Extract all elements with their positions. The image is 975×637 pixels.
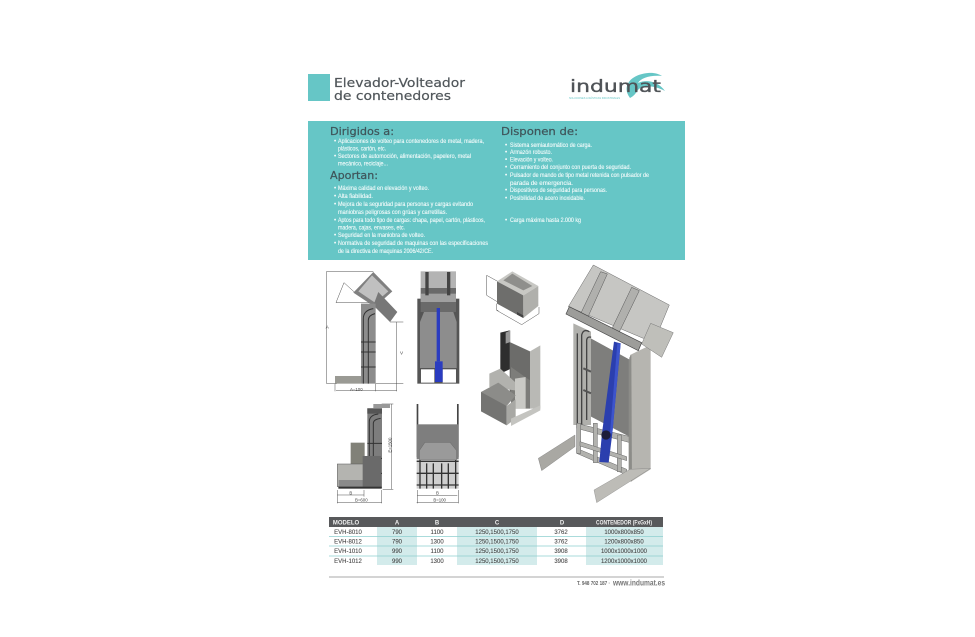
list: Aportan: Seguridad en la maniobra de volteo. — [338, 232, 425, 239]
list: Disponen de: Dispositivos de seguridad para personas. — [510, 187, 607, 194]
list: Aportan: • — [334, 185, 336, 192]
title square — [308, 74, 330, 101]
list: Disponen de: Sistema semiautomático de carga. — [510, 142, 592, 149]
list: Aportan: • — [334, 193, 336, 200]
technical drawing: side elevation raised: A=100 — [350, 387, 363, 392]
footer contact: T. 948 702 187 · — [577, 581, 610, 587]
logo wordmark: indumat — [570, 77, 662, 96]
list: Disponen de: • — [505, 156, 507, 164]
list: Dirigidos a: Aplicaciones de volteo para contenedores de metal, madera, — [338, 138, 484, 145]
list: Aportan: Máxima calidad en elevación y volteo. — [338, 185, 429, 192]
list: Dirigidos a: Sectores de automoción, alimentación, papelero, metal — [338, 153, 471, 160]
list: Aportan — [334, 185, 488, 255]
3D view: elevator with container tipped — [538, 265, 673, 503]
table rows: 1250,1500,1750 — [475, 530, 519, 536]
list: Aportan: • — [334, 201, 336, 208]
list: Disponen de: • — [505, 217, 507, 224]
list: Dirigidos a: plásticos, cartón, etc. — [338, 146, 386, 152]
logo: indumat — [569, 73, 665, 100]
technical drawing: side elevation raised: A — [326, 325, 330, 330]
list: Disponen de: • — [505, 142, 507, 149]
logo swoosh — [627, 73, 665, 98]
list: Disponen de: Armazón robusto. — [510, 149, 552, 156]
title text: Elevador-Volteador — [334, 75, 466, 90]
list: Dirigidos a — [334, 138, 484, 168]
header labels: B — [435, 520, 440, 526]
list: Dirigidos a: • — [334, 153, 336, 160]
technical drawing: front elevation lowered — [417, 404, 459, 503]
heading: Aportan: Aportan: — [330, 169, 378, 182]
panel: teal information panel — [308, 121, 685, 260]
table rows: 790 — [392, 530, 403, 536]
back panel — [591, 338, 629, 437]
header labels: MODELO — [333, 520, 359, 526]
feet — [538, 435, 575, 471]
blue cylinder — [599, 342, 621, 463]
table shaded columns — [377, 527, 663, 565]
list: Aportan: Mejora de la seguridad para personas y cargas evitando — [338, 201, 473, 208]
table rows: 1000x1000x1000 — [601, 549, 648, 555]
table rows: EVH-1010 — [334, 549, 363, 555]
list: Disponen de: • — [505, 149, 507, 156]
technical drawing: side elevation lowered: B — [349, 491, 352, 496]
list: Disponen de — [505, 142, 649, 224]
table header — [329, 517, 663, 527]
list: Disponen de: Elevación y volteo. — [510, 156, 553, 164]
table rows: 1250,1500,1750 — [475, 549, 519, 555]
table rows: 1300 — [430, 540, 444, 546]
list: Aportan: • — [334, 217, 336, 224]
table rows: 1100 — [431, 530, 444, 536]
table rows: 990 — [392, 549, 403, 555]
footer contact: www.indumat.es — [612, 578, 665, 588]
technical drawing: front elevation lowered: B=100 — [433, 498, 447, 503]
technical drawing: side elevation raised: V — [400, 351, 404, 356]
technical drawing: side elevation lowered: B=600 — [355, 498, 368, 503]
list: Disponen de: parada de emergencia. — [510, 180, 573, 187]
left post — [573, 323, 591, 425]
table rows: 3762 — [554, 530, 568, 536]
table rows: 790 — [392, 540, 403, 546]
technical drawing: front elevation raised — [417, 271, 459, 384]
list: Disponen de: • — [505, 164, 507, 171]
list: Disponen de: • — [505, 187, 507, 194]
table rows: EVH-8012 — [334, 540, 363, 546]
list: Aportan: Normativa de seguridad de maquinas con las especificaciones — [338, 240, 488, 247]
table rows: 3762 — [554, 540, 568, 546]
technical drawing: side elevation raised — [326, 271, 404, 392]
table rows: 1100 — [431, 549, 444, 555]
technical drawing: side elevation lowered — [337, 404, 393, 503]
table rows: EVH-1012 — [334, 559, 363, 565]
list: Dirigidos a: • — [334, 138, 336, 145]
logo tagline: SOLUCIONES LOGÍSTICAS INDUSTRIALES — [569, 96, 620, 100]
side plate — [642, 323, 673, 357]
table rows: 1200x800x850 — [604, 540, 644, 546]
list: Aportan: maniobras peligrosas con grúas y carretillas. — [338, 209, 447, 216]
title block — [308, 74, 466, 103]
technical drawing: front elevation lowered: B — [436, 491, 439, 496]
header labels: CONTENEDOR (FxGxH) — [596, 520, 652, 526]
table rows: 1300 — [430, 559, 444, 565]
heading: Disponen de: Disponen de: — [501, 125, 578, 138]
table rows: 1250,1500,1750 — [475, 559, 519, 565]
heading: Dirigidos a: Dirigidos a: — [330, 125, 394, 138]
rails — [580, 272, 607, 318]
list: Aportan: Aptos para todo tipo de cargas: chapa, papel, cartón, plásticos, — [338, 217, 485, 224]
list: Disponen de: Pulsador de mando de tipo metal retenida con pulsador de — [510, 172, 649, 179]
list: Disponen de: • — [505, 172, 507, 179]
tilted container plate — [568, 265, 669, 338]
title text: de contenedores — [334, 88, 451, 103]
table rows: 1000x800x850 — [604, 530, 644, 536]
table rows: 1200x1000x1000 — [601, 559, 648, 565]
list: Aportan: de la directiva de maquinas 2006/42/CE. — [338, 248, 433, 255]
3D view: elevator with container lowered — [481, 330, 540, 426]
list: Aportan: Alta fiabilidad. — [338, 193, 373, 200]
title text — [334, 75, 466, 103]
header labels: C — [495, 520, 500, 526]
list: Disponen de: Cerramiento del conjunto con puerta de seguridad. — [510, 164, 631, 171]
bottom frames — [577, 423, 630, 475]
list: Aportan: • — [334, 232, 336, 239]
list: Disponen de: Carga máxima hasta 2.000 kg — [510, 217, 581, 224]
table rows: 990 — [392, 559, 403, 565]
table rows — [334, 530, 648, 565]
crossbar — [566, 307, 642, 351]
table rows: 3908 — [554, 559, 568, 565]
list: Dirigidos a: mecánico, reciclaje... — [338, 160, 388, 168]
technical drawing: side elevation lowered: E=1500 — [388, 437, 393, 453]
table rows: 3908 — [554, 549, 568, 555]
header labels — [333, 520, 652, 526]
right plate — [630, 345, 651, 482]
list: Aportan: madera, cajas, envases, etc. — [338, 224, 405, 232]
header labels: A — [395, 520, 400, 526]
white gap under crossbar — [591, 334, 629, 359]
table rows: 1250,1500,1750 — [475, 540, 519, 546]
table: models — [329, 517, 663, 565]
3D view: container — [487, 271, 539, 325]
table rows: EVH-8010 — [334, 530, 363, 536]
list: Disponen de: • — [505, 195, 507, 202]
list: Aportan: • — [334, 240, 336, 247]
footer contact — [329, 576, 665, 588]
list: Disponen de: Posibilidad de acero inoxidable. — [510, 195, 585, 202]
header labels: D — [560, 520, 565, 526]
